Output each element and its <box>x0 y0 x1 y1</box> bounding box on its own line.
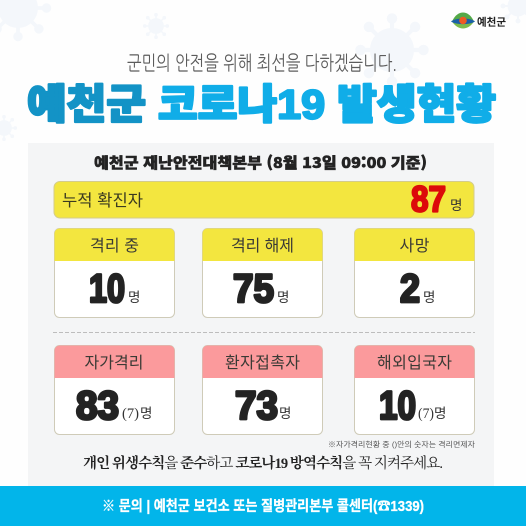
title <box>27 82 496 128</box>
virus background decorations <box>0 0 526 141</box>
note: (7) <box>122 406 139 422</box>
card: overseas arrivals <box>354 346 474 434</box>
card value: 83 <box>76 384 119 428</box>
card value: 73 <box>235 384 278 428</box>
card label: 환자접촉자 <box>225 354 300 372</box>
card: self quarantine <box>54 346 174 434</box>
card: patient contacts <box>202 346 322 434</box>
safety message: 개인 위생수칙을 준수하고 코로나19 방역수칙을 꼭 지켜주세요. <box>83 454 443 472</box>
value: 87: 87 <box>411 178 446 220</box>
card value: 10 <box>379 384 416 428</box>
logo text: 예천군 <box>477 16 506 28</box>
card label: 격리 해제 <box>231 237 294 255</box>
title: county name: 예천군 <box>27 82 146 128</box>
panel: status board <box>28 143 494 486</box>
label: cumulative confirmed: 누적 확진자 <box>62 191 143 210</box>
cumulative confirmed bar <box>54 178 474 220</box>
footer contact bar <box>0 486 526 526</box>
card value: 10 <box>89 267 125 311</box>
unit: 명 <box>140 406 152 421</box>
unit: 명 <box>434 406 446 421</box>
unit: 명 <box>128 290 140 305</box>
card: in isolation <box>54 228 174 318</box>
panel heading: 예천군 재난안전대책본부 (8월 13일 09:00 기준) <box>94 152 427 173</box>
card label: 해외입국자 <box>377 354 452 372</box>
card label: 격리 중 <box>90 237 139 255</box>
logo: Yecheon county <box>451 12 506 28</box>
footnote: ※자가격리현황 중 ()안의 숫자는 격리면제자 <box>328 439 475 449</box>
note: (7) <box>418 406 434 422</box>
card value: 2 <box>400 267 420 311</box>
footer text: ※ 문의 | 예천군 보건소 또는 질병관리본부 콜센터(☎1339) <box>102 498 424 515</box>
card: released <box>202 228 322 318</box>
card label: 사망 <box>400 237 430 255</box>
icon: county emblem <box>451 12 475 28</box>
card value: 75 <box>233 267 274 311</box>
unit: 명 <box>450 198 462 213</box>
tagline: 군민의 안전을 위해 최선을 다하겠습니다. <box>127 53 397 73</box>
title: corona status: 코로나19 발생현황 <box>158 82 496 128</box>
unit: 명 <box>277 290 289 305</box>
card label: 자가격리 <box>84 354 144 372</box>
unit: 명 <box>423 290 435 305</box>
unit: 명 <box>279 406 291 421</box>
card: deaths <box>354 228 474 318</box>
